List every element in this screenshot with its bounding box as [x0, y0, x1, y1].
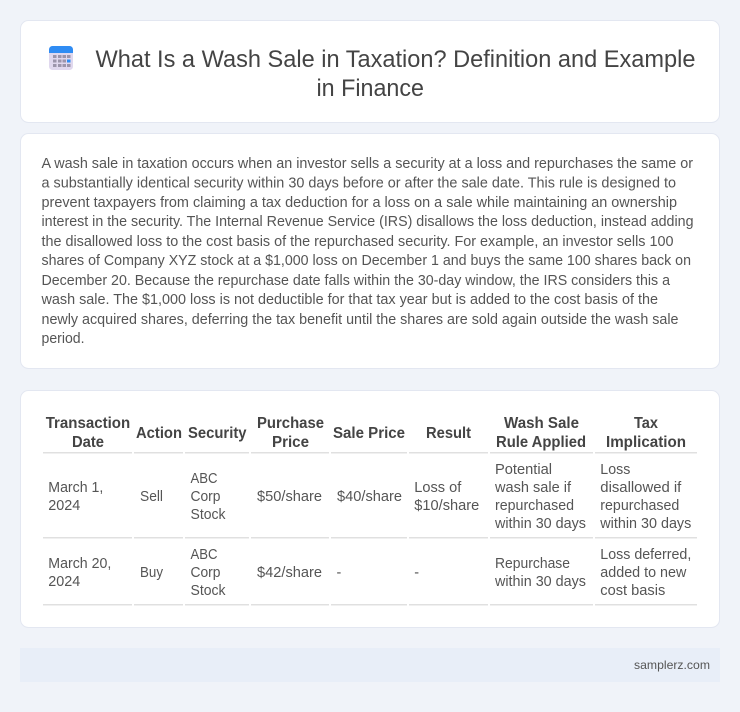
table row: March 20 buy: Stock [190, 583, 226, 599]
table row: March 20 buy: $42/share [257, 565, 322, 581]
table header row: Tax [634, 415, 658, 432]
table row: March 1 sell: repurchased [495, 498, 574, 514]
table header row: Rule Applied [496, 434, 586, 451]
table header row: Wash Sale [504, 415, 579, 432]
table row: March 20 buy: Corp [190, 565, 220, 581]
table row: March 1 sell: $40/share [337, 489, 402, 505]
text block: explanation paragraph [41, 156, 694, 347]
table row: March 20 buy: March 20, [48, 556, 111, 572]
text block: explanation paragraph: wash sale. The $1,000 loss is not deductible for that tax year but is added to the cost basis of the [41, 292, 658, 308]
footer text: source: samplerz.com [634, 658, 710, 672]
table row: March 20 buy: ABC [190, 547, 218, 563]
table header row: Result [426, 425, 472, 442]
panel: definition and example [20, 134, 720, 368]
table header row: Security [188, 425, 247, 442]
table row: March 1 sell: 2024 [48, 498, 80, 514]
panel: transaction table [20, 390, 720, 628]
text block: explanation paragraph: newly acquired shares, deferring the tax benefit until the shares are sold again outside the wash sale [42, 312, 678, 328]
table header row [43, 415, 697, 454]
table header row: Sale Price [333, 425, 405, 442]
table row: March 1 sell: March 1, [48, 480, 103, 496]
table header row: Price [272, 434, 309, 451]
table row: March 1 sell: within 30 days [494, 516, 586, 532]
text block: explanation paragraph: the disallowed loss to the cost basis of the repurchased security. For example, an investor sells 100 [42, 234, 674, 250]
table row: March 20 buy [43, 547, 697, 606]
table row: March 20 buy: Repurchase [495, 556, 570, 572]
title: in Finance [316, 75, 424, 102]
table header row: Implication [606, 434, 686, 451]
table row: March 20 buy: within 30 days [494, 574, 586, 590]
title: What Is a Wash Sale in Taxation? Definition and Example [96, 46, 696, 73]
table row: March 1 sell: disallowed if [600, 480, 682, 496]
table row: March 1 sell: Corp [190, 489, 220, 505]
text block: explanation paragraph: December 20. Because the repurchase date falls within the 30-day window, the IRS considers this a [42, 273, 670, 289]
table row: March 1 sell: $50/share [257, 489, 322, 505]
text block: explanation paragraph: prevent taxpayers from claiming a tax deduction for a loss on a sale while maintaining an ownership [42, 195, 677, 211]
table row: March 20 buy: cost basis [600, 583, 665, 599]
text block: explanation paragraph: a substantially identical security within 30 days before or after the sale date. This rule is designed to [42, 176, 676, 192]
panel: title card [20, 20, 720, 122]
table header row: Purchase [257, 415, 324, 432]
icon: calendar [49, 46, 73, 70]
title [96, 46, 696, 102]
table row: March 1 sell: wash sale if [494, 480, 572, 496]
table row: March 1 sell: ABC [190, 471, 218, 487]
footer bar [20, 648, 720, 682]
table row: March 1 sell: repurchased [600, 498, 679, 514]
table row: March 1 sell: Sell [140, 489, 163, 505]
table row: March 1 sell: Potential [495, 462, 552, 478]
table row: March 20 buy: - [414, 565, 419, 581]
table row: March 20 buy: - [336, 565, 342, 581]
table row: March 1 sell: within 30 days [599, 516, 691, 532]
text block: explanation paragraph: period. [42, 331, 84, 347]
table row: March 1 sell: $10/share [414, 498, 479, 514]
table row: March 20 buy: Buy [140, 565, 164, 581]
text block: explanation paragraph: shares of Company XYZ stock at a $1,000 loss on December 1 and buys the same 100 shares back on [42, 253, 691, 269]
table header row: Date [72, 434, 104, 451]
table header row: Transaction [46, 415, 130, 432]
text block: explanation paragraph: interest in the security. The Internal Revenue Service (IRS) disallows the loss deduction, instead adding [42, 214, 694, 230]
table row: March 20 buy: 2024 [48, 574, 80, 590]
table row: March 1 sell: Stock [190, 507, 226, 523]
text block: explanation paragraph: A wash sale in taxation occurs when an investor sells a security at a loss and repurchases the same or [42, 156, 693, 172]
table row: March 1 sell: Loss of [414, 480, 462, 496]
table row: March 1 sell [43, 462, 697, 538]
table row: March 20 buy: added to new [600, 565, 687, 581]
table header row: Action [136, 425, 182, 442]
table row: March 20 buy: Loss deferred, [600, 547, 691, 563]
table row: March 1 sell: Loss [600, 462, 630, 478]
